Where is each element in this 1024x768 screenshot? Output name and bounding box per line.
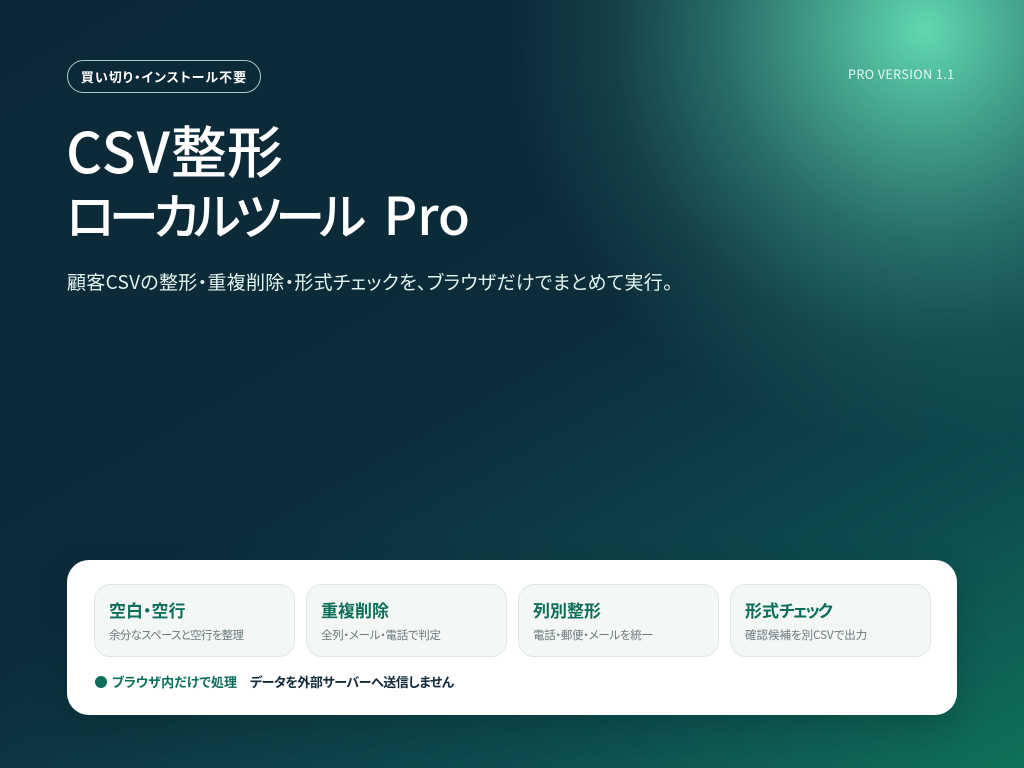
- subtitle: 顧客CSVの整形・重複削除・形式チェックを、ブラウザだけでまとめて実行。: [67, 268, 673, 295]
- card: format check: 形式チェック: [745, 597, 831, 622]
- privacy note: no upload: データを外部サーバーへ送信しません: [250, 672, 454, 691]
- card: column formatting: [518, 584, 718, 657]
- badge: one-time purchase, no install: [67, 60, 261, 93]
- panel: features: [67, 560, 957, 715]
- card: format check: 確認候補を別CSVで出力: [745, 627, 867, 643]
- title: CSV整形: [66, 109, 283, 190]
- card: duplicates: [306, 584, 506, 657]
- card: whitespace: 余分なスペースと空行を整理: [109, 627, 243, 643]
- card: format check: [730, 584, 930, 657]
- badge: one-time purchase, no install: 買い切り・インストール不要: [81, 67, 247, 86]
- title: [66, 109, 470, 250]
- card: whitespace: [94, 584, 294, 657]
- icon: status dot: [95, 676, 107, 688]
- card: column formatting: 列別整形: [533, 597, 601, 622]
- version label: PRO VERSION 1.1: [848, 64, 955, 83]
- privacy note: browser only: ブラウザ内だけで処理: [112, 672, 237, 691]
- card: whitespace: 空白・空行: [109, 597, 186, 622]
- title: ローカルツール Pro: [66, 175, 470, 250]
- card: column formatting: 電話・郵便・メールを統一: [533, 627, 653, 643]
- card: duplicates: 重複削除: [321, 597, 389, 622]
- card: duplicates: 全列・メール・電話で判定: [321, 627, 441, 643]
